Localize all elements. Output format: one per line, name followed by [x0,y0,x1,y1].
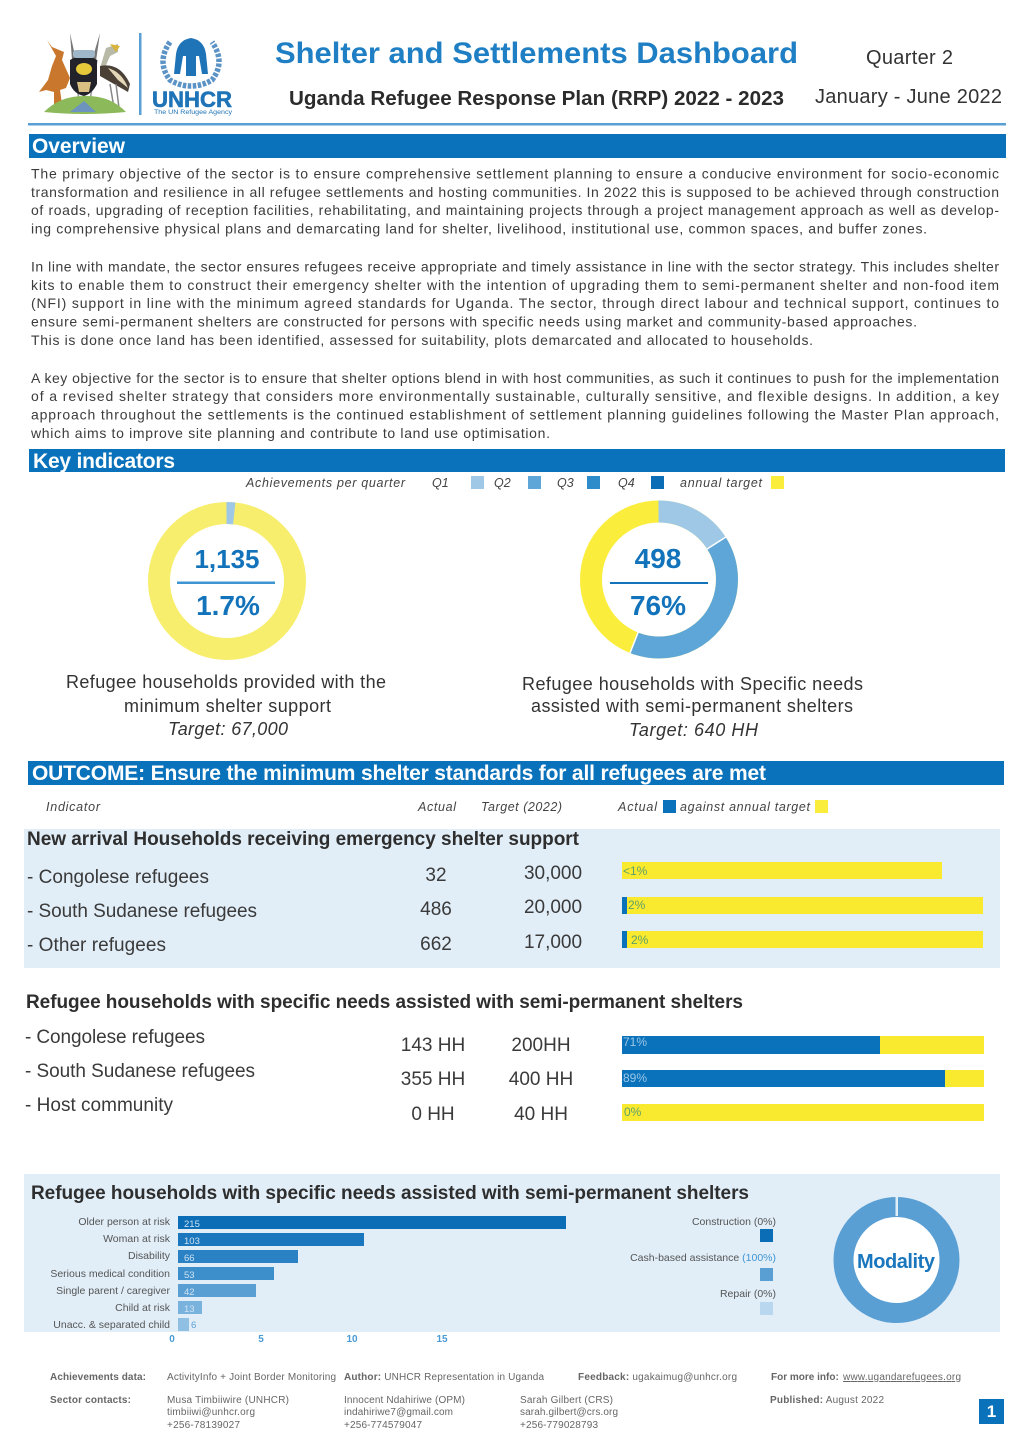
heading: new arrival households: New arrival Households receiving emergency shelter support [27,829,580,850]
logo: UNHCR [152,38,232,116]
legend: achievements per quarter: Q4 [618,476,635,490]
logo divider [139,33,142,115]
logo: UNHCR: UNHCR [152,87,232,112]
row: Host community, semi-permanent: - Host community [25,1095,174,1116]
footer: sector contacts: +256-779028793 [520,1420,598,1431]
bar chart: specific needs categories: 6 [191,1320,196,1331]
text block: overview paragraph 1: transformation and resilience in all refugee settlements and hosting communities. In 2022 this is supposed to be achieved through construction [31,184,999,200]
row: South Sudanese refugees, semi-permanent: 89% [623,1071,647,1085]
text block: overview paragraph 2: (NFI) support in line with the minimum agreed standards for Uganda. The sector, through direct labour and technical support, continues to [31,295,999,311]
footer: sector contacts: timbiiwi@unhcr.org [167,1407,255,1418]
row: Congolese refugees [27,862,942,888]
legend: modality: Repair (0%) [720,1288,776,1300]
chart axis labels: 5 [258,1334,264,1345]
bar chart: specific needs categories: Disability [128,1250,171,1262]
footer: sector contacts: Innocent Ndahiriwe (OPM) [344,1395,465,1406]
bar chart: specific needs categories: 42 [184,1287,195,1298]
text block: overview paragraph 3: of a revised shelter strategy that considers more environmentally sustainable, culturally sensitive, and flexible designs. In addition, a key [31,388,999,404]
row: Other refugees [27,931,983,956]
row: South Sudanese refugees [27,897,983,922]
period label: January - June 2022 [815,86,1002,108]
panel: specific needs and modality [24,1174,1000,1332]
footer: data sources: Achievements data: [50,1372,146,1383]
row: Congolese refugees, semi-permanent: 71% [623,1035,647,1049]
donut chart: minimum shelter support [159,513,295,649]
text block: overview paragraph 2: In line with mandate, the sector ensures refugees receive appropriate and timely assistance in line with the sector strategy. This includes shelter [31,258,999,274]
bar chart: specific needs categories: Single parent / caregiver [56,1285,170,1297]
bar chart: specific needs categories: 215 [184,1219,200,1230]
footer: data sources: Feedback: ugakaimug@unhcr.org [578,1372,737,1383]
row: Host community, semi-permanent [25,1095,984,1125]
table header: Actual [617,800,658,814]
donut chart: minimum shelter support: 1.7% [196,590,260,621]
row: South Sudanese refugees: 486 [420,899,452,920]
legend: achievements per quarter: Q3 [557,476,574,490]
bar chart: specific needs categories: Child at risk [115,1302,171,1314]
row: South Sudanese refugees: 2% [628,898,646,912]
row: Congolese refugees, semi-permanent: 200HH [511,1035,571,1056]
page number: 1 [987,1402,996,1421]
legend: achievements per quarter [245,476,784,490]
legend: modality: Cash-based assistance (100%) [630,1252,776,1264]
chart axis labels: 10 [346,1334,358,1345]
footer: sector contacts: +256-774579047 [344,1420,422,1431]
chart axis labels [169,1334,448,1345]
legend: achievements per quarter: Q1 [432,476,449,490]
footer: sector contacts: Published: August 2022 [770,1395,884,1406]
row: Congolese refugees, semi-permanent [25,1027,984,1056]
row: Congolese refugees: 30,000 [524,863,582,884]
heading: Overview [29,134,1006,158]
legend: achievements per quarter: Q2 [494,476,511,490]
donut chart: modality: Modality [857,1251,936,1273]
text block: overview paragraph 2: This is done once land has been identified, assessed for suitability, plots demarcated and allocated to households. [31,332,813,348]
page number [979,1399,1004,1424]
row: South Sudanese refugees: 20,000 [524,897,582,918]
caption: semi-permanent shelters: Target: 640 HH [629,720,759,740]
bar chart: specific needs categories [50,1216,566,1331]
footer: sector contacts: Sarah Gilbert (CRS) [520,1395,613,1406]
bar chart: specific needs categories: 13 [184,1304,195,1315]
heading: specific needs chart: Refugee households with specific needs assisted with semi-permanent shelters [31,1183,749,1204]
donut chart: minimum shelter support: 1,135 [194,544,260,574]
row: Other refugees: 2% [631,933,649,947]
chart axis labels: 0 [169,1334,175,1345]
row: Other refugees: 662 [420,934,452,955]
row: South Sudanese refugees, semi-permanent [25,1061,984,1090]
row: Other refugees: 17,000 [524,932,582,953]
footer: sector contacts [50,1395,884,1431]
row: Congolese refugees: <1% [623,864,648,878]
caption: minimum shelter support: Refugee households provided with the [66,672,386,692]
row: South Sudanese refugees: - South Sudanese refugees [27,901,257,922]
footer: data sources [50,1372,961,1383]
heading: Key indicators [29,449,1005,473]
heading: Key indicators: Key indicators [33,450,175,473]
bar chart: specific needs categories: Woman at risk [103,1233,171,1245]
row: Host community, semi-permanent: 0 HH [411,1104,455,1125]
text block: overview paragraph 2: kits to enable them to construct their emergency shelter with the intention of upgrading them to semi-permanent shelter and non-food item [31,277,999,293]
footer: data sources: For more info: [771,1372,839,1383]
row: Congolese refugees, semi-permanent: 143 HH [401,1035,465,1056]
text block: overview paragraph 1: of roads, upgrading of reception facilities, rehabilitating, and maintaining projects through a project management approach as well as develop- [31,202,999,218]
footer: data sources: Author: UNHCR Representation in Uganda [344,1372,544,1383]
logo: Uganda coat of arms [39,33,130,114]
bar chart: specific needs categories: Older person at risk [78,1216,171,1228]
caption: minimum shelter support: Target: 67,000 [168,719,288,739]
footer: sector contacts: Sector contacts: [50,1395,131,1406]
bar chart: specific needs categories: Unacc. & separated child [53,1319,170,1331]
caption: minimum shelter support: minimum shelter support [124,696,331,716]
footer: data sources: ActivityInfo + Joint Border Monitoring [167,1372,336,1383]
caption: semi-permanent shelters: Refugee households with Specific needs [522,674,863,694]
logo: UNHCR: The UN Refugee Agency [154,110,232,116]
chart axis labels: 15 [436,1334,448,1345]
bar chart: specific needs categories: 103 [184,1236,200,1247]
caption: minimum shelter support [66,672,386,739]
donut chart: modality [844,1196,950,1313]
table header: Actual [417,800,457,814]
legend: achievements per quarter: annual target [680,476,763,490]
footer: sector contacts: indahiriwe7@gmail.com [344,1407,453,1418]
row: South Sudanese refugees, semi-permanent: 400 HH [509,1069,573,1090]
bar chart: specific needs categories: 53 [184,1270,195,1281]
row: Other refugees: - Other refugees [27,935,166,956]
bar chart: specific needs categories: 66 [184,1253,195,1264]
table header: against annual target [680,800,811,814]
caption: semi-permanent shelters: assisted with semi-permanent shelters [531,696,853,716]
table header: Indicator [46,800,101,814]
row: Congolese refugees: 32 [425,865,447,886]
text block: overview paragraph 3 [30,370,999,441]
kob [39,40,70,104]
text block: overview paragraph 1: The primary objective of the sector is to ensure comprehensive settlement planning to ensure a conducive environment for socio-economic [31,166,999,182]
bar chart: specific needs categories: Serious medical condition [50,1268,170,1280]
heading: specific needs households: Refugee households with specific needs assisted with semi-permanent shelters [26,992,743,1013]
text block: overview paragraph 2: ensure semi-permanent shelters are constructed for persons with specific needs using market and community-based approaches. [31,314,917,330]
row: Host community, semi-permanent: 40 HH [514,1104,568,1125]
table header: Target (2022) [481,800,562,814]
row: South Sudanese refugees, semi-permanent: - South Sudanese refugees [25,1061,255,1082]
shield [70,56,97,96]
subtitle: Uganda Refugee Response Plan (RRP) 2022 - 2023 [289,88,784,110]
donut chart: semi-permanent shelters [591,512,728,655]
heading: outcome: OUTCOME: Ensure the minimum shelter standards for all refugees are met [32,762,766,785]
legend: achievements per quarter: Achievements per quarter [245,476,406,490]
row: Host community, semi-permanent: 0% [624,1105,642,1119]
panel: new arrival households [24,829,1000,968]
footer: data sources: www.ugandarefugees.org [842,1372,961,1383]
donut chart: semi-permanent shelters: 498 [635,543,681,574]
text block: overview paragraph 3: approach throughout the settlements is the continued establishment of settlement planning guidelines following the Master Plan approach, [31,406,999,422]
row: Congolese refugees, semi-permanent: - Congolese refugees [25,1027,205,1048]
text block: overview paragraph 2 [31,258,999,348]
legend: modality: Construction (0%) [692,1216,776,1228]
donut chart: semi-permanent shelters: 76% [630,590,686,621]
footer: sector contacts: +256-78139027 [167,1420,240,1431]
ground [44,96,126,114]
heading: Overview: Overview [32,135,126,158]
row: Congolese refugees: - Congolese refugees [27,867,209,888]
row: South Sudanese refugees, semi-permanent: 355 HH [401,1069,465,1090]
legend: modality [630,1216,776,1315]
caption: semi-permanent shelters [522,674,863,740]
text block: overview paragraph 3: which aims to improve site planning and contribute to land use optimisation. [30,425,550,441]
text block: overview paragraph 1 [31,166,999,236]
table header [46,800,828,814]
quarter label: Quarter 2 [866,47,953,69]
crane [100,44,118,70]
text block: overview paragraph 3: A key objective for the sector is to ensure that shelter options blend in with host communities, as such it continues to push for the implementation [31,370,999,386]
footer: sector contacts: sarah.gilbert@crs.org [520,1407,618,1418]
text block: overview paragraph 1: ing comprehensive physical plans and demarcating land for shelter, livelihood, institutional use, common spaces, and buffer zones. [31,220,927,236]
title: Shelter and Settlements Dashboard [275,37,798,70]
footer: sector contacts: Musa Timbiiwire (UNHCR) [167,1395,289,1406]
